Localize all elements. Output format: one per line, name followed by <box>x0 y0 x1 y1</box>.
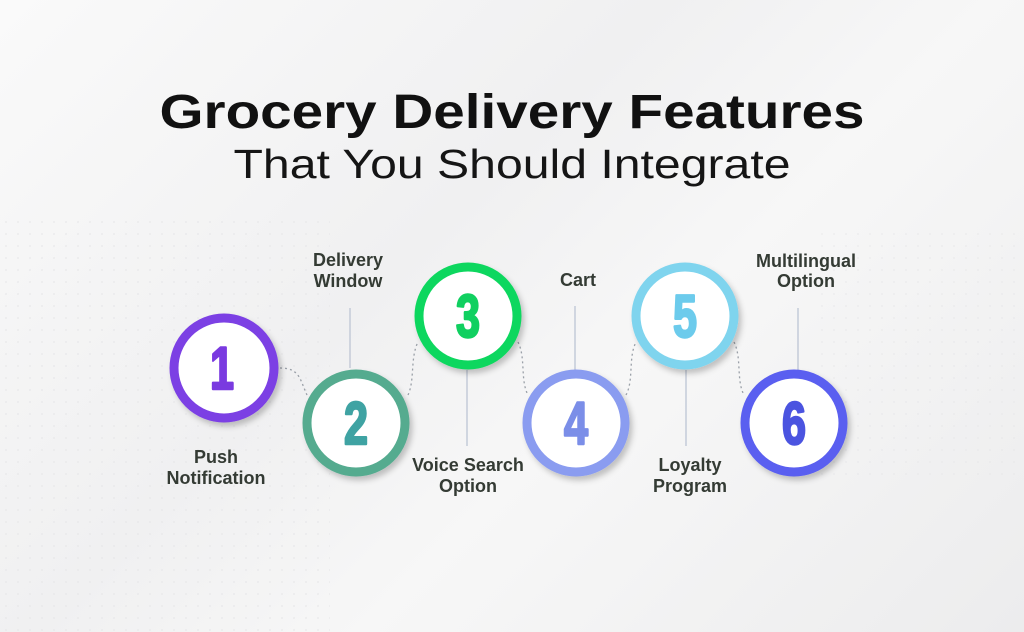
step 6: Multilingual <box>756 251 856 271</box>
step 1 <box>166 318 274 488</box>
step 5: Loyalty <box>658 455 722 475</box>
step 6: 6 <box>782 391 806 458</box>
step 1: 1 <box>210 336 234 403</box>
connectors <box>280 342 744 395</box>
step 3 <box>412 267 524 496</box>
step 3: Option <box>439 476 497 496</box>
step 4 <box>527 270 625 472</box>
step 3: Voice Search <box>412 455 524 475</box>
step 5: 5 <box>673 284 697 351</box>
step 2: Window <box>314 271 383 291</box>
step 2: 2 <box>344 391 368 458</box>
step 5 <box>636 267 734 496</box>
title: Grocery Delivery Features <box>160 86 864 139</box>
step 4: 4 <box>564 391 588 458</box>
step 1: Push <box>194 447 238 467</box>
step 5: Program <box>653 476 727 496</box>
step 6: Option <box>777 271 835 291</box>
step 4: Cart <box>560 270 596 290</box>
vertical lines <box>350 306 798 446</box>
subtitle: That You Should Integrate <box>234 141 790 187</box>
step 1: Notification <box>166 468 266 488</box>
step 6 <box>745 251 856 472</box>
step 2 <box>307 250 405 472</box>
step 2: Delivery <box>313 250 383 270</box>
step 3: 3 <box>456 284 480 351</box>
